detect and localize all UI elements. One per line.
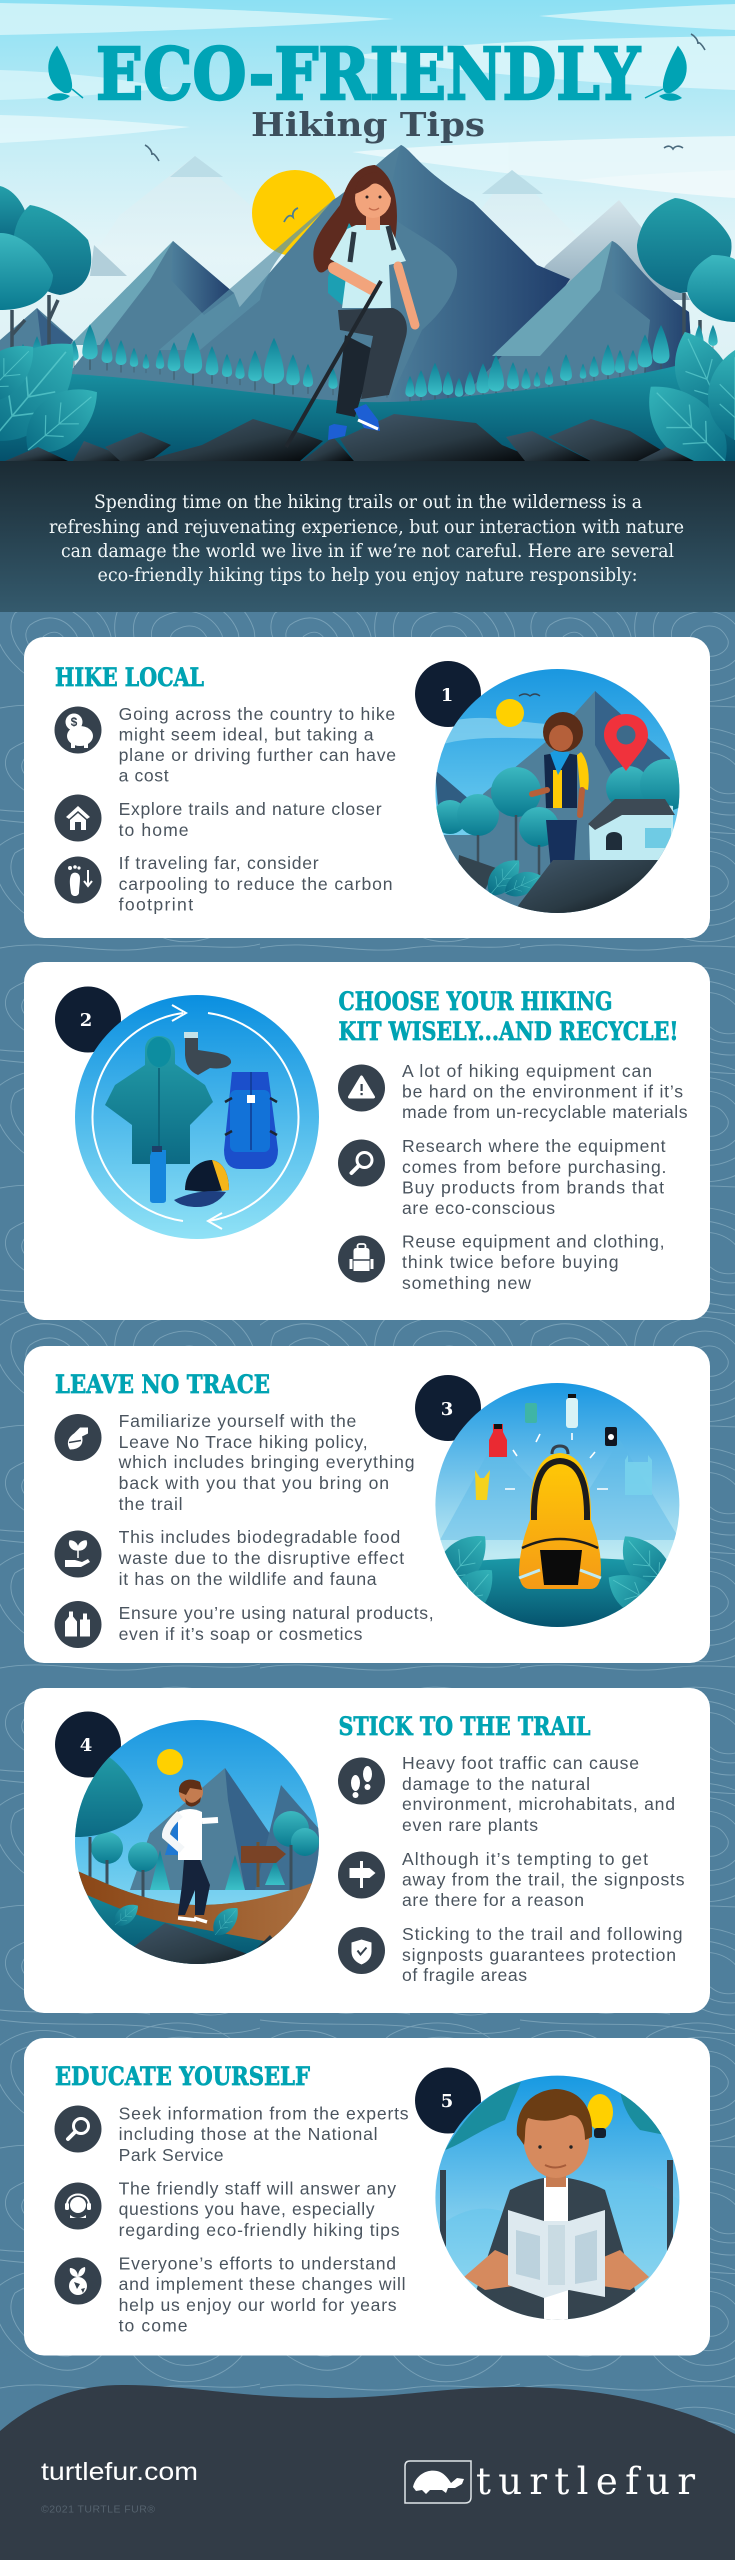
icon: headset [54,2182,102,2230]
illustration: person reading map [435,2075,680,2320]
icon: house [54,794,102,842]
heading: ECO-FRIENDLY: ECO-FRIENDLY [96,32,641,116]
logo wordmark: turtlefur [476,2460,695,2503]
text: bullet 3 [119,1603,434,1644]
text: bullet 2: Buy products from brands that [402,1178,664,1198]
footer [0,2385,735,2560]
text: bullet 3: even if it’s soap or cosmetics [119,1624,363,1644]
text: bullet 3: Reuse equipment and clothing, [402,1232,664,1252]
large trees [0,186,735,356]
text: bullet 1: Park Service [119,2145,224,2165]
text: bullet 2: comes from before purchasing. [402,1157,666,1177]
intro text: can damage the world we live in if we’re not careful. Here are several [61,541,674,562]
foliage leaves [0,320,735,483]
number badge 3: 3 [441,1399,453,1420]
text: bullet 2: it has on the wildlife and fauna [119,1569,377,1589]
logo: turtlefur [405,2460,695,2503]
panel: leave no trace [24,1346,710,1663]
text: bullet 1: including those at the National [119,2124,378,2144]
number badge 4 [55,1712,121,1778]
text: bullet 1: Heavy foot traffic can cause [402,1753,639,1773]
illustration: recycled hiking kit [75,995,319,1239]
text: bullet 1: made from un-recyclable materials [402,1102,688,1122]
text: bullet 1: back with you that you bring on [119,1473,389,1493]
text: bullet 1 [402,1061,688,1122]
heading: STICK TO THE TRAIL [338,1712,591,1741]
text: bullet 1: a cost [119,766,169,786]
icon: warning [338,1064,385,1112]
heading: HIKE LOCAL [55,663,204,692]
heading: LEAVE NO TRACE [55,1370,270,1399]
website url: turtlefur.com [41,2458,198,2486]
sky [0,0,735,461]
main mountains [0,145,695,410]
text: bullet 2 [402,1136,666,1218]
text: bullet 3: think twice before buying [402,1252,619,1272]
icon: left leaf [47,47,83,101]
text: bullet 3: Everyone’s efforts to understand [119,2254,396,2274]
sun [252,170,338,256]
text: bullet 1: Going across the country to hike [119,704,395,724]
number badge 5: 5 [441,2091,453,2112]
text: bullet 2: This includes biodegradable food [119,1527,400,1547]
illustration: backpack and waste [424,1383,683,1630]
text: bullet 1: which includes bringing everything [118,1452,415,1472]
title: Eco-Friendly Hiking Tips [47,32,686,144]
text: bullet 3: Sticking to the trail and following [402,1924,682,1944]
intro band [0,461,735,612]
number badge 4: 4 [80,1735,92,1756]
text: bullet 3: to come [119,2316,188,2336]
background: topographic contour pattern [0,612,735,2462]
icon: right leaf [645,47,686,101]
text: bullet 2 [118,1527,404,1589]
text: bullet 3 [119,853,393,915]
text: bullet 3: If traveling far, consider [119,853,319,873]
icon: magnifier [54,2106,102,2152]
text: bullet 2: to home [119,820,189,840]
text: bullet 2: away from the trail, the signposts [402,1870,685,1890]
logo mark: turtle [405,2461,471,2503]
ground [0,360,735,461]
icon: shield [338,1927,385,1974]
text: bullet 2: are there for a reason [402,1890,584,1910]
illustration: hiker on trail [75,1720,320,1975]
rocks [5,414,694,461]
copyright: ©2021 TURTLE FUR® [41,2504,155,2516]
hero illustration: sky, mountains, hiker [0,0,735,483]
text: bullet 1 [119,2104,409,2165]
intro text: eco-friendly hiking tips to help you enjoy nature responsibly: [98,565,638,586]
text: bullet 1: be hard on the environment if it’s [402,1082,683,1102]
icon: footprints [338,1758,385,1804]
intro text: Spending time on the hiking trails or out in the wilderness is a [94,492,642,513]
text: bullet 3: help us enjoy our world for years [119,2295,397,2315]
text: bullet 1 [118,1411,415,1514]
icon: piggy bank: $ [71,715,78,729]
icon: backpack [338,1236,385,1282]
text: bullet 1: environment, microhabitats, and [402,1794,675,1814]
text: bullet 1 [402,1753,675,1835]
icon: natural products [54,1601,102,1648]
text: bullet 2: waste due to the disruptive effect [118,1548,404,1568]
text: bullet 3 [402,1232,664,1293]
text: bullet 2: Explore trails and nature closer [119,799,382,819]
text: bullet 1: damage to the natural [402,1774,590,1794]
intro text [49,492,684,586]
icon: magnifier [338,1140,385,1186]
icon: footprint mark [54,1414,102,1461]
icon: signpost [338,1852,385,1898]
panel: educate yourself [24,2038,710,2356]
number badge 1: 1 [441,685,453,706]
number badge 3 [415,1375,481,1441]
illustration: hiker with map pin [433,669,692,920]
heading: EDUCATE YOURSELF [55,2062,310,2091]
text: bullet 3 [402,1924,682,1985]
icon: footprint [54,856,102,904]
text: bullet 3: Ensure you’re using natural products, [119,1603,434,1623]
panel: stick to the trail [24,1688,710,2013]
text: bullet 2 [119,2178,400,2240]
text: bullet 2: Although it’s tempting to get [402,1849,648,1869]
text: bullet 3 [119,2254,406,2336]
text: bullet 1: A lot of hiking equipment can [402,1061,652,1081]
number badge 2 [55,986,121,1052]
heading: CHOOSE YOUR HIKING [338,987,612,1016]
icon: piggy bank [54,706,102,754]
text: bullet 3: of fragile areas [402,1965,527,1985]
text: bullet 1: might seem ideal, but taking a [119,724,374,744]
text: bullet 2: The friendly staff will answer any [119,2178,396,2198]
panel: hike local [24,637,710,938]
heading [338,987,678,1046]
text: bullet 3: and implement these changes will [119,2274,406,2294]
text: bullet 2: regarding eco-friendly hiking tips [119,2220,400,2240]
text: bullet 2: are eco-conscious [402,1198,555,1218]
hiker woman [286,165,415,447]
icon: hand holding sprout [54,1530,102,1578]
text: bullet 1: the trail [119,1494,183,1514]
panel: choose your hiking kit [24,962,710,1320]
birds [145,34,705,161]
intro text: refreshing and rejuvenating experience, but our interaction with nature [49,517,684,538]
number badge 5 [415,2068,481,2134]
text: bullet 1: even rare plants [402,1815,538,1835]
text: bullet 2: Research where the equipment [402,1136,666,1156]
text: bullet 3: something new [402,1273,531,1293]
text: bullet 1: plane or driving further can have [119,745,396,765]
text: bullet 3: footprint [119,895,193,915]
distant mountains [90,156,690,300]
text: bullet 2 [119,799,382,840]
text: bullet 2 [402,1849,685,1910]
number badge 1 [415,661,481,727]
cypress tree row [18,324,718,405]
subheading: Hiking Tips: Hiking Tips [251,105,485,144]
text: bullet 1: Seek information from the experts [119,2104,409,2124]
text: bullet 3: carpooling to reduce the carbon [119,874,393,894]
text: bullet 3: signposts guarantees protection [402,1945,676,1965]
number badge 2: 2 [80,1010,92,1031]
text: bullet 1: Familiarize yourself with the [119,1411,356,1431]
text: bullet 2: questions you have, especially [119,2199,375,2219]
icon: globe with leaf [54,2258,102,2304]
clouds [0,3,735,198]
text: bullet 1 [119,704,396,786]
text: bullet 1: Leave No Trace hiking policy, [119,1432,368,1452]
